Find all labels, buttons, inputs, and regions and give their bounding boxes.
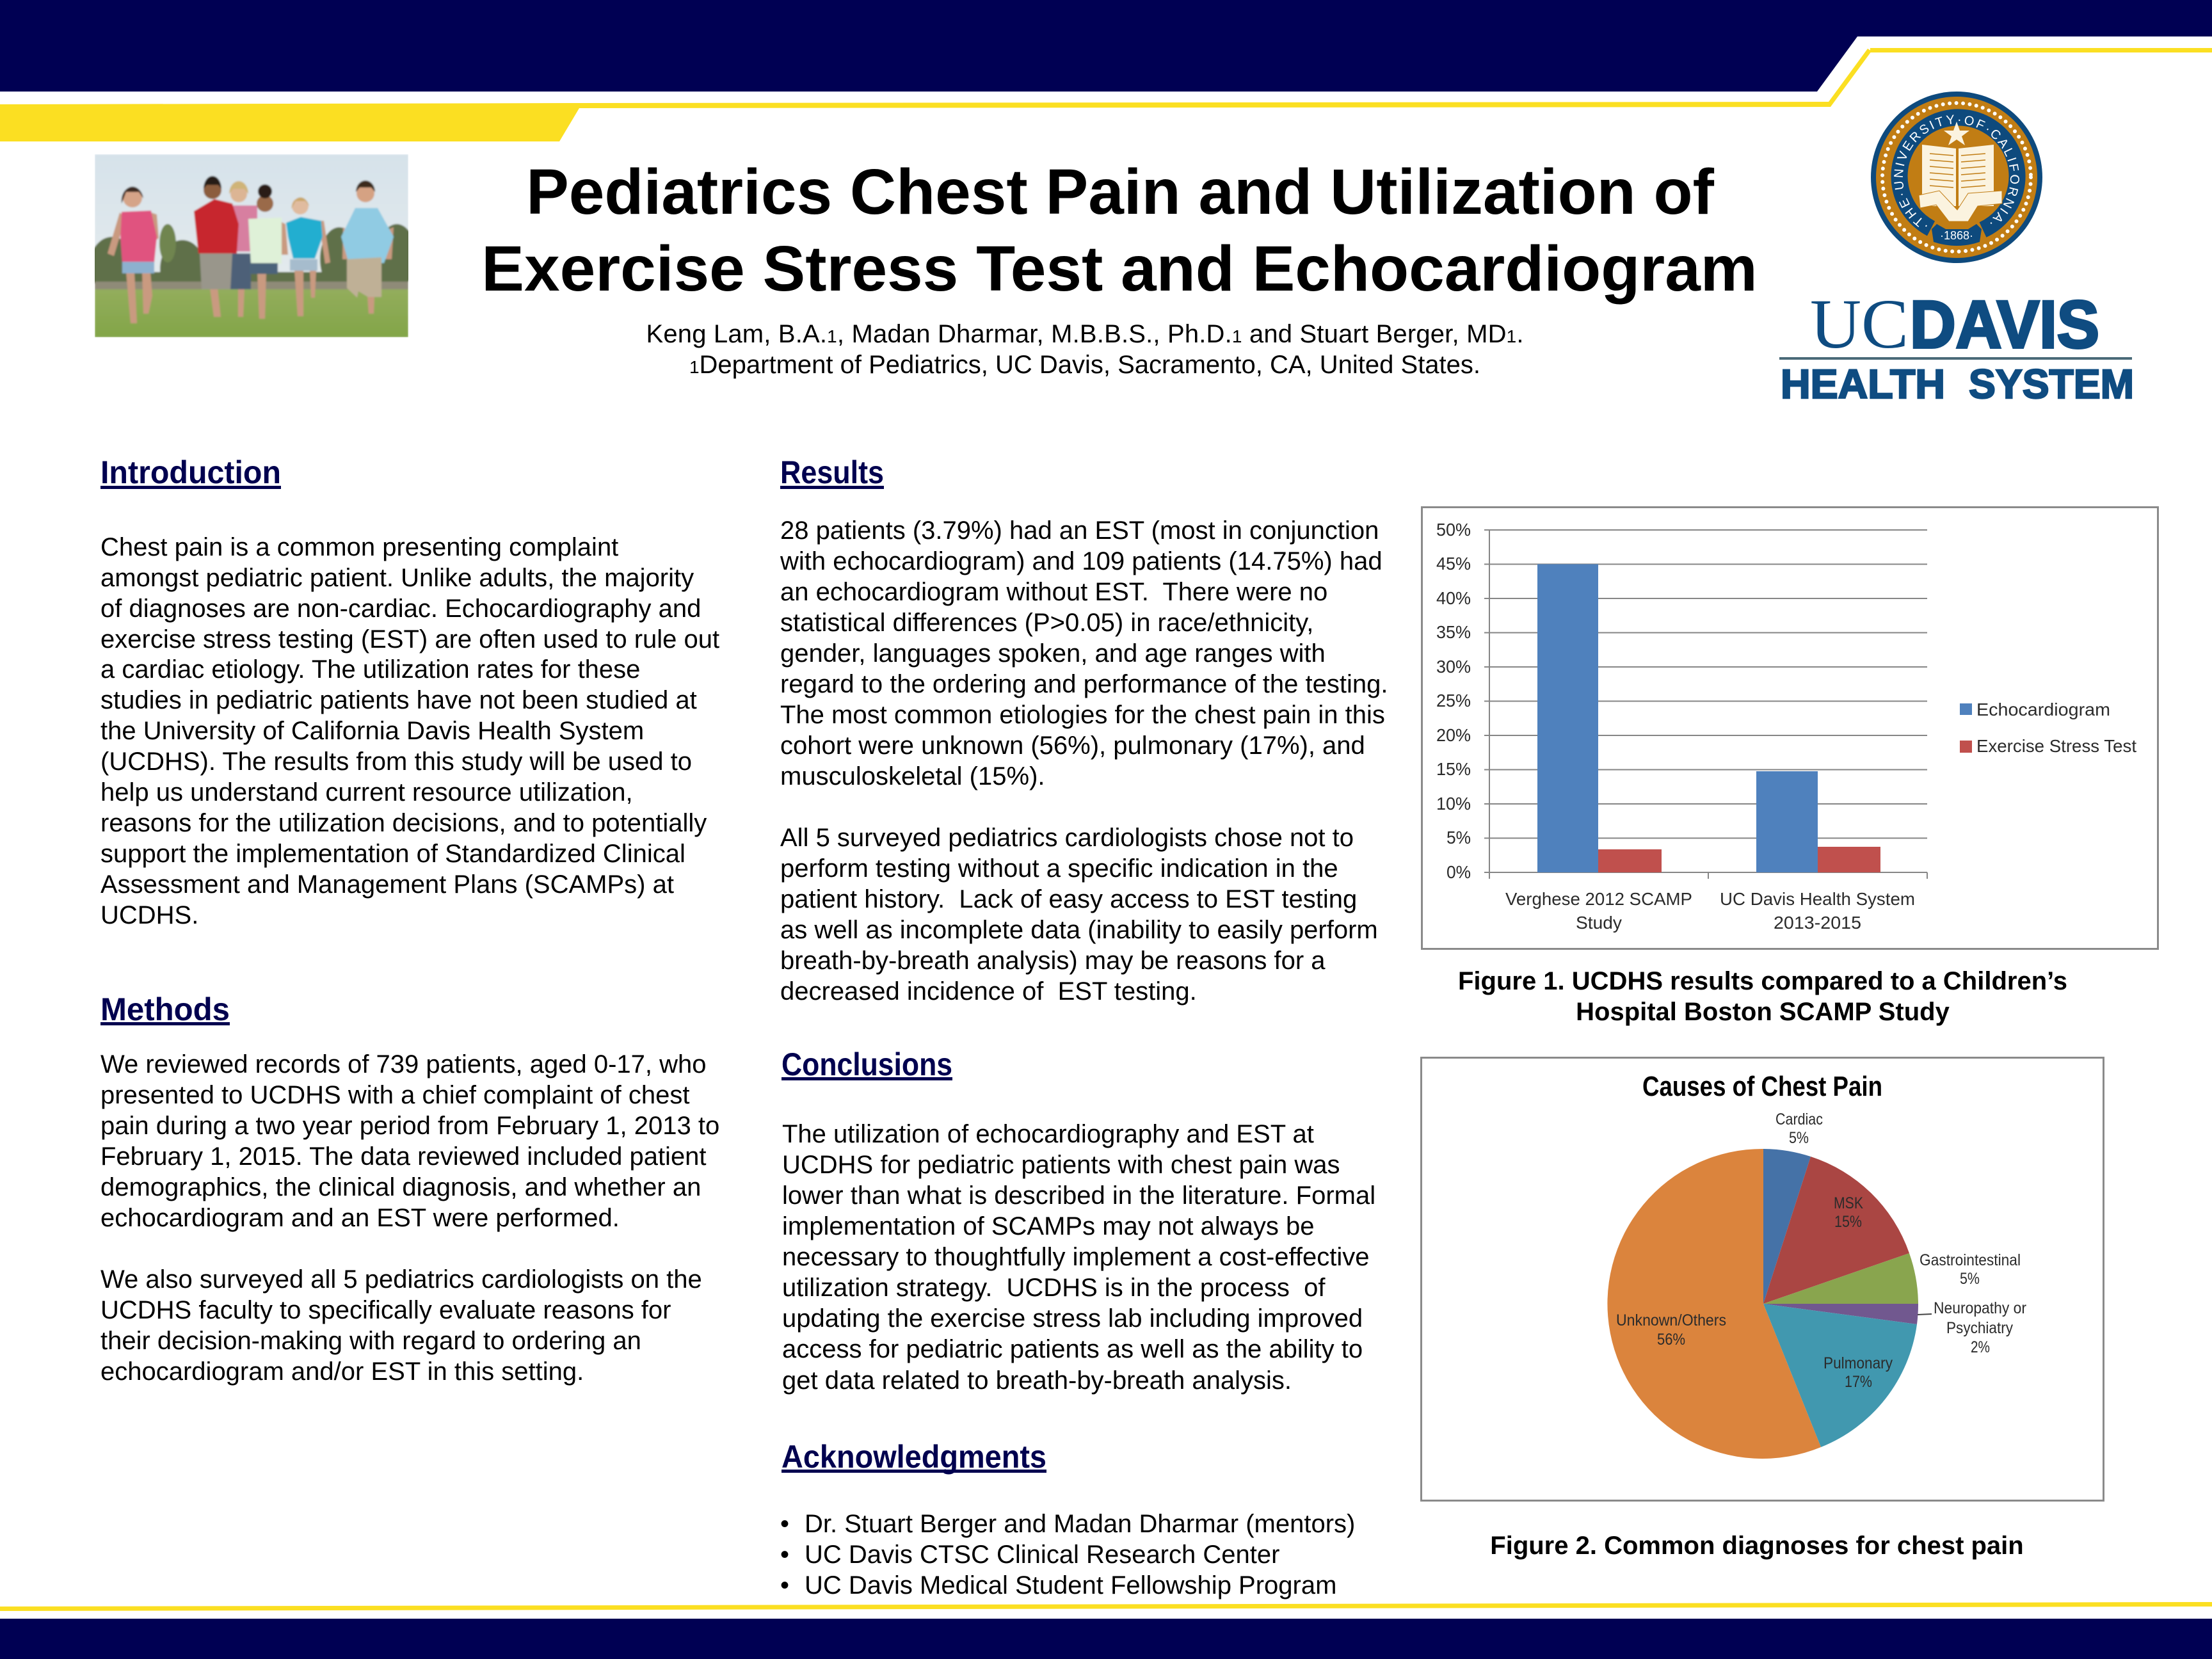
- bar chart: figure 1: 0%: [1447, 862, 1471, 882]
- pie chart: figure 2: MSK: [1834, 1194, 1863, 1212]
- bar chart: figure 1: 15%: [1436, 759, 1471, 779]
- text block: results body: perform testing without a specific indication in the: [780, 854, 1338, 883]
- text block: conclusions body: updating the exercise stress lab including improved: [782, 1304, 1363, 1333]
- text block: methods body: We also surveyed all 5 pediatrics cardiologists on the: [100, 1265, 702, 1294]
- text block: results body: decreased incidence of EST testing.: [780, 977, 1197, 1006]
- text block: conclusions body: necessary to thoughtfully implement a cost-effective: [782, 1243, 1370, 1271]
- bar chart: figure 1: 10%: [1436, 794, 1471, 813]
- legend: [1960, 700, 2136, 756]
- header banner: [0, 0, 2212, 141]
- bar chart: figure 1: [1422, 507, 2158, 949]
- text block: introduction body: reasons for the utilization decisions, and to potentially: [100, 809, 707, 837]
- text block: methods body: We reviewed records of 739 patients, aged 0-17, who: [100, 1050, 706, 1078]
- text block: methods body: pain during a two year period from February 1, 2013 to: [100, 1112, 719, 1140]
- text block: introduction body: studies in pediatric patients have not been studied at: [100, 686, 697, 714]
- text block: introduction body: the University of California Davis Health System: [100, 717, 644, 745]
- text block: methods body: February 1, 2015. The data reviewed included patient: [100, 1142, 707, 1171]
- pie chart: figure 2: Pulmonary: [1823, 1354, 1893, 1372]
- bar chart: figure 1: 40%: [1436, 588, 1471, 608]
- text block: results body: statistical differences (P>0.05) in race/ethnicity,: [780, 609, 1313, 637]
- text block: conclusions body: utilization strategy. UCDHS is in the process of: [782, 1274, 1326, 1302]
- text block: results body: an echocardiogram without EST. There were no: [780, 578, 1327, 606]
- list: acknowledgments: Dr. Stuart Berger and Madan Dharmar (mentors): [805, 1510, 1355, 1538]
- text block: conclusions body: implementation of SCAMPs may not always be: [782, 1212, 1314, 1240]
- list: acknowledgments: •: [780, 1510, 789, 1538]
- pie chart: figure 2: Neuropathy or: [1934, 1299, 2026, 1317]
- footer banner: [0, 1602, 2212, 1659]
- icon: University of California seal: ·1868·: [1940, 229, 1973, 242]
- text block: conclusions body: The utilization of echocardiography and EST at: [782, 1120, 1314, 1148]
- text block: introduction body: (UCDHS). The results from this study will be used to: [100, 748, 692, 776]
- pie chart: figure 2: Unknown/Others: [1616, 1311, 1726, 1329]
- text block: introduction body: [100, 533, 719, 929]
- title: Pediatrics Chest Pain and Utilization of: [526, 156, 1715, 228]
- bar chart: figure 1: 2013-2015: [1774, 913, 1861, 933]
- pie chart: figure 2: Cardiac: [1775, 1110, 1823, 1128]
- panel: introduction: [100, 454, 719, 929]
- authors and affiliation: [646, 320, 1523, 379]
- text block: methods body: UCDHS faculty to specifically evaluate reasons for: [100, 1296, 671, 1324]
- text block: conclusions body: get data related to breath-by-breath analysis.: [782, 1366, 1292, 1395]
- list: acknowledgments: [780, 1510, 1355, 1599]
- bar chart: figure 1: Study: [1576, 913, 1622, 933]
- pie chart: figure 2: Causes of Chest Pain: [1642, 1071, 1882, 1102]
- logo: UC Davis Health System: [1779, 285, 2134, 407]
- text block: results body: gender, languages spoken, and age ranges with: [780, 639, 1326, 668]
- bar chart: figure 1: 5%: [1447, 828, 1471, 847]
- caption: figure 1: Hospital Boston SCAMP Study: [1576, 998, 1950, 1026]
- pie chart: figure 2: 17%: [1845, 1373, 1872, 1391]
- list: acknowledgments: UC Davis CTSC Clinical Research Center: [805, 1541, 1279, 1569]
- heading: introduction: Introduction: [100, 454, 281, 490]
- authors and affiliation: 1Department of Pediatrics, UC Davis, Sacramento, CA, United States.: [689, 351, 1480, 379]
- pie chart: figure 2: 2%: [1971, 1338, 1990, 1356]
- logo: UC Davis Health System: SYSTEM: [1969, 361, 2134, 407]
- icon: University of California seal: [1871, 92, 2042, 263]
- pie chart: figure 2: 56%: [1657, 1331, 1685, 1349]
- text block: introduction body: Assessment and Management Plans (SCAMPs) at: [100, 870, 674, 899]
- pie chart: figure 2: 15%: [1834, 1213, 1862, 1231]
- bar chart: figure 1: Verghese 2012 SCAMP: [1505, 889, 1692, 909]
- text block: results body: cohort were unknown (56%), pulmonary (17%), and: [780, 732, 1365, 760]
- list: acknowledgments: •: [780, 1571, 789, 1599]
- bar chart: figure 1: 50%: [1436, 520, 1471, 540]
- bar chart: figure 1: 25%: [1436, 691, 1471, 710]
- text block: methods body: presented to UCDHS with a chief complaint of chest: [100, 1081, 689, 1109]
- bar chart: figure 1: UC Davis Health System: [1720, 889, 1915, 909]
- list: acknowledgments: UC Davis Medical Student Fellowship Program: [805, 1571, 1336, 1599]
- pie chart: figure 2: Psychiatry: [1946, 1319, 2013, 1337]
- text block: methods body: their decision-making with regard to ordering an: [100, 1327, 641, 1355]
- text block: results body: breath-by-breath analysis) may be reasons for a: [780, 947, 1326, 975]
- panel: methods: [100, 991, 719, 1386]
- bar chart: figure 1: 45%: [1436, 554, 1471, 573]
- heading: results: Results: [780, 454, 884, 490]
- text block: results body: regard to the ordering and performance of the testing.: [780, 670, 1388, 698]
- text block: introduction body: Chest pain is a common presenting complaint: [100, 533, 618, 561]
- logo: UC Davis Health System: DAVIS: [1910, 287, 2099, 362]
- text block: methods body: [100, 1050, 719, 1386]
- panel: acknowledgments: [780, 1439, 1355, 1599]
- text block: conclusions body: [782, 1120, 1375, 1395]
- panel: conclusions: [781, 1046, 1375, 1395]
- text block: introduction body: support the implementation of Standardized Clinical: [100, 840, 685, 868]
- bar chart: figure 1: 35%: [1436, 622, 1471, 642]
- heading: acknowledgments: Acknowledgments: [781, 1439, 1046, 1475]
- heading: conclusions: Conclusions: [781, 1046, 952, 1082]
- text block: results body: 28 patients (3.79%) had an EST (most in conjunction: [780, 517, 1379, 545]
- text block: introduction body: amongst pediatric patient. Unlike adults, the majority: [100, 564, 694, 592]
- text block: results body: musculoskeletal (15%).: [780, 762, 1045, 790]
- pie chart: figure 2: 5%: [1960, 1270, 1980, 1288]
- text block: introduction body: exercise stress testing (EST) are often used to rule out: [100, 625, 719, 653]
- list: acknowledgments: •: [780, 1541, 789, 1569]
- bar chart: figure 1: 30%: [1436, 657, 1471, 677]
- legend: Exercise Stress Test: [1976, 736, 2136, 756]
- panel: results: [780, 454, 1388, 1006]
- text block: results body: [780, 517, 1388, 1006]
- pie chart: figure 2: 5%: [1789, 1129, 1809, 1147]
- text block: methods body: echocardiogram and/or EST in this setting.: [100, 1358, 584, 1386]
- text block: results body: with echocardiogram) and 109 patients (14.75%) had: [780, 547, 1382, 575]
- text block: conclusions body: lower than what is described in the literature. Formal: [782, 1182, 1375, 1210]
- authors and affiliation: Keng Lam, B.A.1, Madan Dharmar, M.B.B.S., Ph.D.1 and Stuart Berger, MD1.: [646, 320, 1523, 348]
- text block: introduction body: a cardiac etiology. The utilization rates for these: [100, 655, 640, 684]
- text block: introduction body: UCDHS.: [100, 901, 198, 929]
- pie chart: figure 2: Gastrointestinal: [1919, 1251, 2021, 1269]
- text block: methods body: echocardiogram and an EST were performed.: [100, 1204, 620, 1232]
- pie chart: figure 2: [1421, 1057, 2103, 1500]
- text block: methods body: demographics, the clinical diagnosis, and whether an: [100, 1173, 701, 1201]
- text block: results body: as well as incomplete data (inability to easily perform: [780, 916, 1378, 944]
- logo: UC Davis Health System: UC: [1810, 285, 1909, 363]
- caption: figure 1: [1458, 967, 2067, 1026]
- logo: UC Davis Health System: HEALTH: [1781, 361, 1945, 407]
- text block: conclusions body: access for pediatric patients as well as the ability to: [782, 1335, 1363, 1363]
- caption: figure 2: Figure 2. Common diagnoses for chest pain: [1490, 1532, 2024, 1560]
- photo: children running: [90, 154, 416, 337]
- title: Exercise Stress Test and Echocardiogram: [481, 233, 1758, 305]
- text block: results body: All 5 surveyed pediatrics cardiologists chose not to: [780, 824, 1354, 852]
- icon: University of California seal: ·THE·UNIVERSITY·OF·CALIFORNIA·: [1894, 115, 2019, 227]
- bar chart: figure 1: 20%: [1436, 725, 1471, 745]
- legend: Echocardiogram: [1976, 700, 2110, 719]
- text block: results body: The most common etiologies for the chest pain in this: [780, 701, 1385, 729]
- text block: introduction body: of diagnoses are non-cardiac. Echocardiography and: [100, 595, 701, 623]
- title: [481, 156, 1758, 305]
- text block: results body: patient history. Lack of easy access to EST testing: [780, 885, 1357, 913]
- text block: introduction body: help us understand current resource utilization,: [100, 778, 633, 806]
- heading: methods: Methods: [100, 991, 230, 1027]
- text block: conclusions body: UCDHS for pediatric patients with chest pain was: [782, 1151, 1340, 1179]
- caption: figure 1: Figure 1. UCDHS results compared to a Children’s: [1458, 967, 2067, 995]
